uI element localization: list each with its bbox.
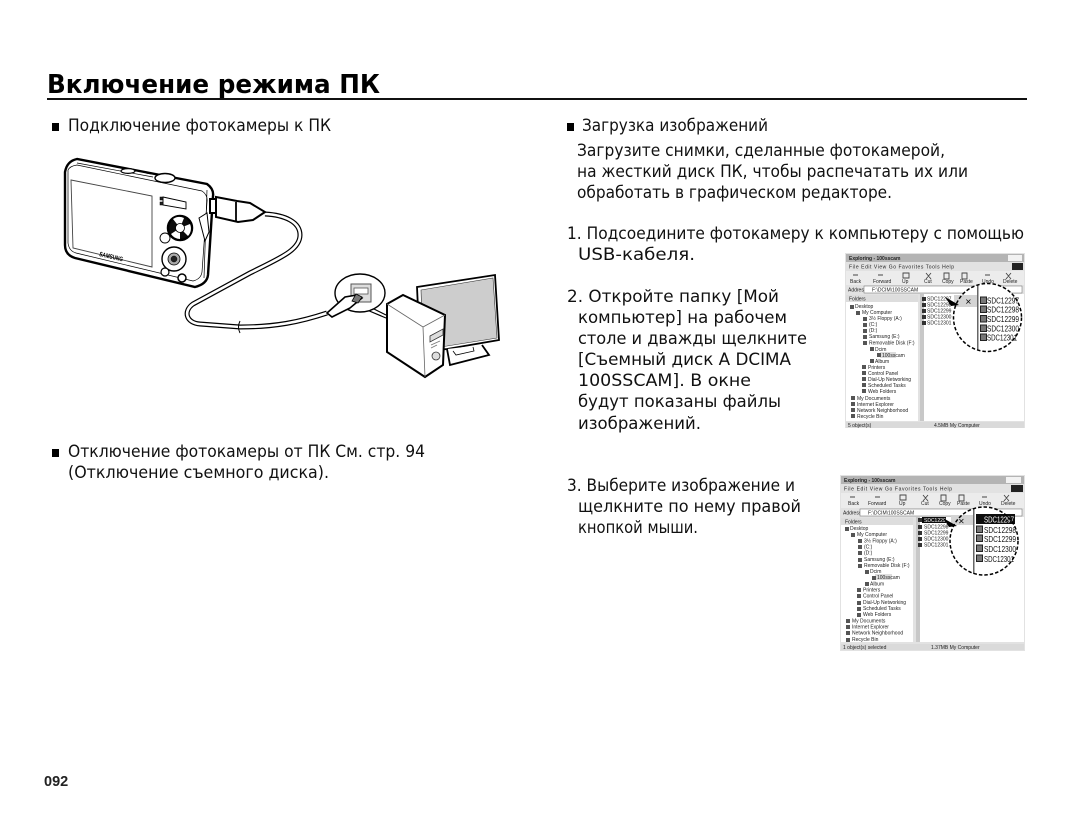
intro text: обработать в графическом редакторе. (577, 183, 892, 202)
screenshot: explorer window, step 2: Printers (868, 365, 886, 371)
magnifier arrow (943, 518, 957, 527)
screenshot: explorer window, step 2: SDC12301 (927, 320, 952, 326)
page number: 092 (44, 774, 68, 790)
screenshot: explorer window, step 2 (845, 253, 1025, 429)
screenshot: explorer window, step 2: SDC12300 (987, 324, 1019, 334)
screenshot: explorer window, step 3: SDC12299 (924, 530, 949, 536)
screenshot: explorer window, step 3: 1.37MB My Computer (931, 645, 980, 651)
illustration: camera connected to PC (65, 159, 499, 377)
screenshot: explorer window, step 2: Removable Disk (F:) (869, 340, 915, 346)
screenshot: explorer window, step 3: Desktop (850, 526, 869, 532)
screenshot: explorer window, step 2: Forward (873, 279, 892, 285)
screenshot: explorer window, step 2: (C:) (869, 322, 878, 328)
screenshot: explorer window, step 2: Undo (982, 279, 994, 285)
screenshot: explorer window, step 2: SDC12297 (927, 296, 952, 302)
screenshot: explorer window, step 3: Back (848, 501, 860, 507)
screenshot: explorer window, step 3: Removable Disk (F:) (864, 563, 910, 569)
screenshot: explorer window, step 2: ✕ (965, 298, 972, 306)
text: disconnect camera: Отключение фотокамеры от ПК См. стр. 94 (68, 442, 425, 461)
screenshot: explorer window, step 2: Folders (849, 296, 866, 302)
screenshot: explorer window, step 3: Internet Explorer (852, 624, 889, 630)
screenshot: explorer window, step 2: SDC12298 (927, 302, 952, 308)
step 2: компьютер] на рабочем (578, 308, 787, 327)
screenshot: explorer window, step 3: SDC12298 (924, 524, 949, 530)
screenshot: explorer window, step 3: Scheduled Tasks (863, 606, 901, 612)
screenshot: explorer window, step 2: SDC12299 (987, 314, 1019, 324)
screenshot: explorer window, step 3: Forward (868, 501, 887, 507)
screenshot: explorer window, step 2: 3½ Floppy (A:) (869, 315, 902, 322)
screenshot: explorer window, step 3: Copy (939, 501, 951, 507)
step 1 (567, 224, 1024, 264)
screenshot: explorer window, step 2: File Edit View Go Favorites Tools Help (849, 264, 954, 270)
intro text: Загрузите снимки, сделанные фотокамерой, (577, 141, 945, 160)
text: disconnect camera (52, 442, 425, 482)
screenshot: explorer window, step 3: Dial-Up Networking (863, 600, 906, 606)
screenshot: explorer window, step 3: (C:) (864, 544, 873, 550)
screenshot: explorer window, step 2: Copy (942, 279, 954, 285)
screenshot: explorer window, step 3: Address (843, 510, 862, 516)
heading: connect camera: Подключение фотокамеры к ПК (68, 116, 331, 135)
screenshot: explorer window, step 3: Recycle Bin (852, 637, 879, 643)
screenshot: explorer window, step 3: SDC12301 (984, 554, 1014, 564)
screenshot: explorer window, step 3: SDC12297 (924, 518, 949, 524)
text: disconnect camera: (Отключение съемного диска). (68, 463, 329, 482)
step 2: будут показаны файлы (578, 392, 781, 411)
screenshot: explorer window, step 2: Album (875, 359, 889, 365)
screenshot: explorer window, step 3: ✕ (958, 517, 965, 526)
USB cable (187, 214, 327, 327)
screenshot: explorer window, step 2: Delete (1003, 279, 1018, 285)
top buttons (155, 174, 175, 182)
screenshot: explorer window, step 3: (D:) (864, 550, 873, 556)
screenshot: explorer window, step 2: SDC12298 (987, 304, 1019, 314)
screenshot: explorer window, step 3: Network Neighborhood (852, 630, 903, 636)
screenshot: explorer window, step 2: Exploring - 100sscam (849, 256, 901, 262)
screenshot: explorer window, step 3: Undo (979, 501, 991, 507)
screenshot: explorer window, step 2: Dcim (875, 347, 886, 353)
screenshot: explorer window, step 3: Folders (845, 520, 862, 526)
screenshot: explorer window, step 2: SDC12299 (927, 308, 952, 314)
screenshot: explorer window, step 2: 4.5MB My Computer (934, 423, 980, 429)
screenshot: explorer window, step 2: My Documents (857, 396, 891, 402)
screenshot: explorer window, step 3: Album (870, 582, 884, 588)
screenshot: explorer window, step 3: File Edit View Go Favorites Tools Help (844, 486, 952, 492)
monitor (417, 275, 499, 352)
screen (71, 180, 152, 267)
camera body (65, 159, 213, 287)
screenshot: explorer window, step 3: SDC12298 (984, 525, 1016, 535)
screenshot: explorer window, step 2: SDC12301 (987, 332, 1017, 342)
intro text: на жесткий диск ПК, чтобы распечатать их или (577, 162, 968, 181)
screenshot: explorer window, step 2: Back (850, 279, 862, 285)
screenshot: explorer window, step 3: SDC12300 (984, 544, 1016, 554)
screenshot: explorer window, step 2: Paste (960, 279, 973, 285)
intro text (577, 141, 968, 202)
screenshot: explorer window, step 2: Recycle Bin (857, 414, 884, 420)
step 3: щелкните по нему правой (578, 497, 801, 516)
screenshot: explorer window, step 2: 100sscam (882, 353, 905, 359)
screenshot: explorer window, step 2: Scheduled Tasks (868, 383, 906, 389)
screenshot: explorer window, step 3: SDC12299 (984, 534, 1016, 544)
step 3 (567, 476, 801, 537)
screenshot: explorer window, step 3: Control Panel (863, 594, 893, 600)
pad (162, 247, 186, 271)
screenshot: explorer window, step 3: 3½ Floppy (A:) (864, 538, 897, 544)
screenshot: explorer window, step 3 (840, 475, 1025, 651)
screenshot: explorer window, step 3: Printers (863, 588, 881, 594)
screenshot: explorer window, step 3: Up (899, 501, 906, 507)
step 2: изображений. (578, 414, 701, 433)
screenshot: explorer window, step 2: Control Panel (868, 371, 898, 377)
screenshot: explorer window, step 3: SDC12297 (984, 514, 1014, 524)
screenshot: explorer window, step 3: Samsung (E:) (864, 557, 895, 563)
screenshot: explorer window, step 2: Dial-Up Networking (868, 377, 911, 383)
display window (163, 197, 186, 209)
step 3: 3. Выберите изображение и (567, 476, 795, 495)
screenshot: explorer window, step 2: My Computer (862, 310, 892, 316)
step 2: 2. Откройте папку [Мой (567, 287, 779, 306)
screenshot: explorer window, step 3: SDC12300 (924, 536, 949, 542)
zoom bubble (367, 308, 386, 318)
heading: download images: Загрузка изображений (582, 116, 768, 135)
magnifier arrow (945, 297, 959, 306)
screenshot: explorer window, step 2: Internet Explorer (857, 402, 894, 408)
camera logo: SAMSUNG (99, 251, 124, 263)
screenshot: explorer window, step 2: F:\DCIM\100SSCAM (872, 288, 918, 294)
camera connector (216, 197, 265, 222)
step 3: кнопкой мыши. (578, 518, 698, 537)
screenshot: explorer window, step 2: Cut (924, 279, 932, 285)
screenshot: explorer window, step 3: Cut (921, 501, 929, 507)
screenshot: explorer window, step 2: SDC12297 (987, 296, 1019, 306)
screenshot: explorer window, step 3: SDC12301 (924, 542, 949, 548)
screenshot: explorer window, step 2: Samsung (E:) (869, 334, 900, 340)
screenshot: explorer window, step 3: 1 object(s) selected (843, 645, 887, 651)
step 1: 1. Подсоедините фотокамеру к компьютеру с помощью (567, 224, 1024, 243)
screenshot: explorer window, step 3: My Computer (857, 532, 887, 538)
step 2: столе и дважды щелкните (578, 329, 807, 348)
PC tower (387, 295, 445, 377)
title: Включение режима ПК (47, 70, 380, 100)
screenshot: explorer window, step 3: Dcim (870, 569, 881, 575)
screenshot: explorer window, step 3: Paste (957, 501, 970, 507)
screenshot: explorer window, step 2: 5 object(s) (848, 423, 872, 429)
screenshot: explorer window, step 2: (D:) (869, 328, 878, 334)
screenshot: explorer window, step 2: Address (848, 288, 867, 294)
screenshot: explorer window, step 3: Web Folders (863, 612, 892, 618)
step 2: 100SSCAM]. В окне (578, 371, 751, 390)
screenshot: explorer window, step 2: Network Neighborhood (857, 408, 908, 414)
screenshot: explorer window, step 3: My Documents (852, 618, 886, 624)
step 1: USB-кабеля. (578, 245, 695, 264)
screenshot: explorer window, step 2: SDC12300 (927, 314, 952, 320)
screenshot: explorer window, step 2: Web Folders (868, 389, 897, 395)
screenshot: explorer window, step 3: 100sscam (877, 575, 900, 581)
USB plug (327, 295, 362, 317)
step 2: [Съемный диск A DCIMA (578, 350, 792, 369)
dial (168, 216, 192, 240)
screenshot: explorer window, step 3: F:\DCIM\100SSCAM (868, 510, 914, 516)
screenshot: explorer window, step 3: Exploring - 100sscam (844, 478, 896, 484)
strap flap (199, 213, 209, 241)
screenshot: explorer window, step 2: Up (902, 279, 909, 285)
screenshot: explorer window, step 2: Desktop (855, 304, 874, 310)
step 2 (567, 287, 807, 433)
screenshot: explorer window, step 3: Delete (1001, 501, 1016, 507)
